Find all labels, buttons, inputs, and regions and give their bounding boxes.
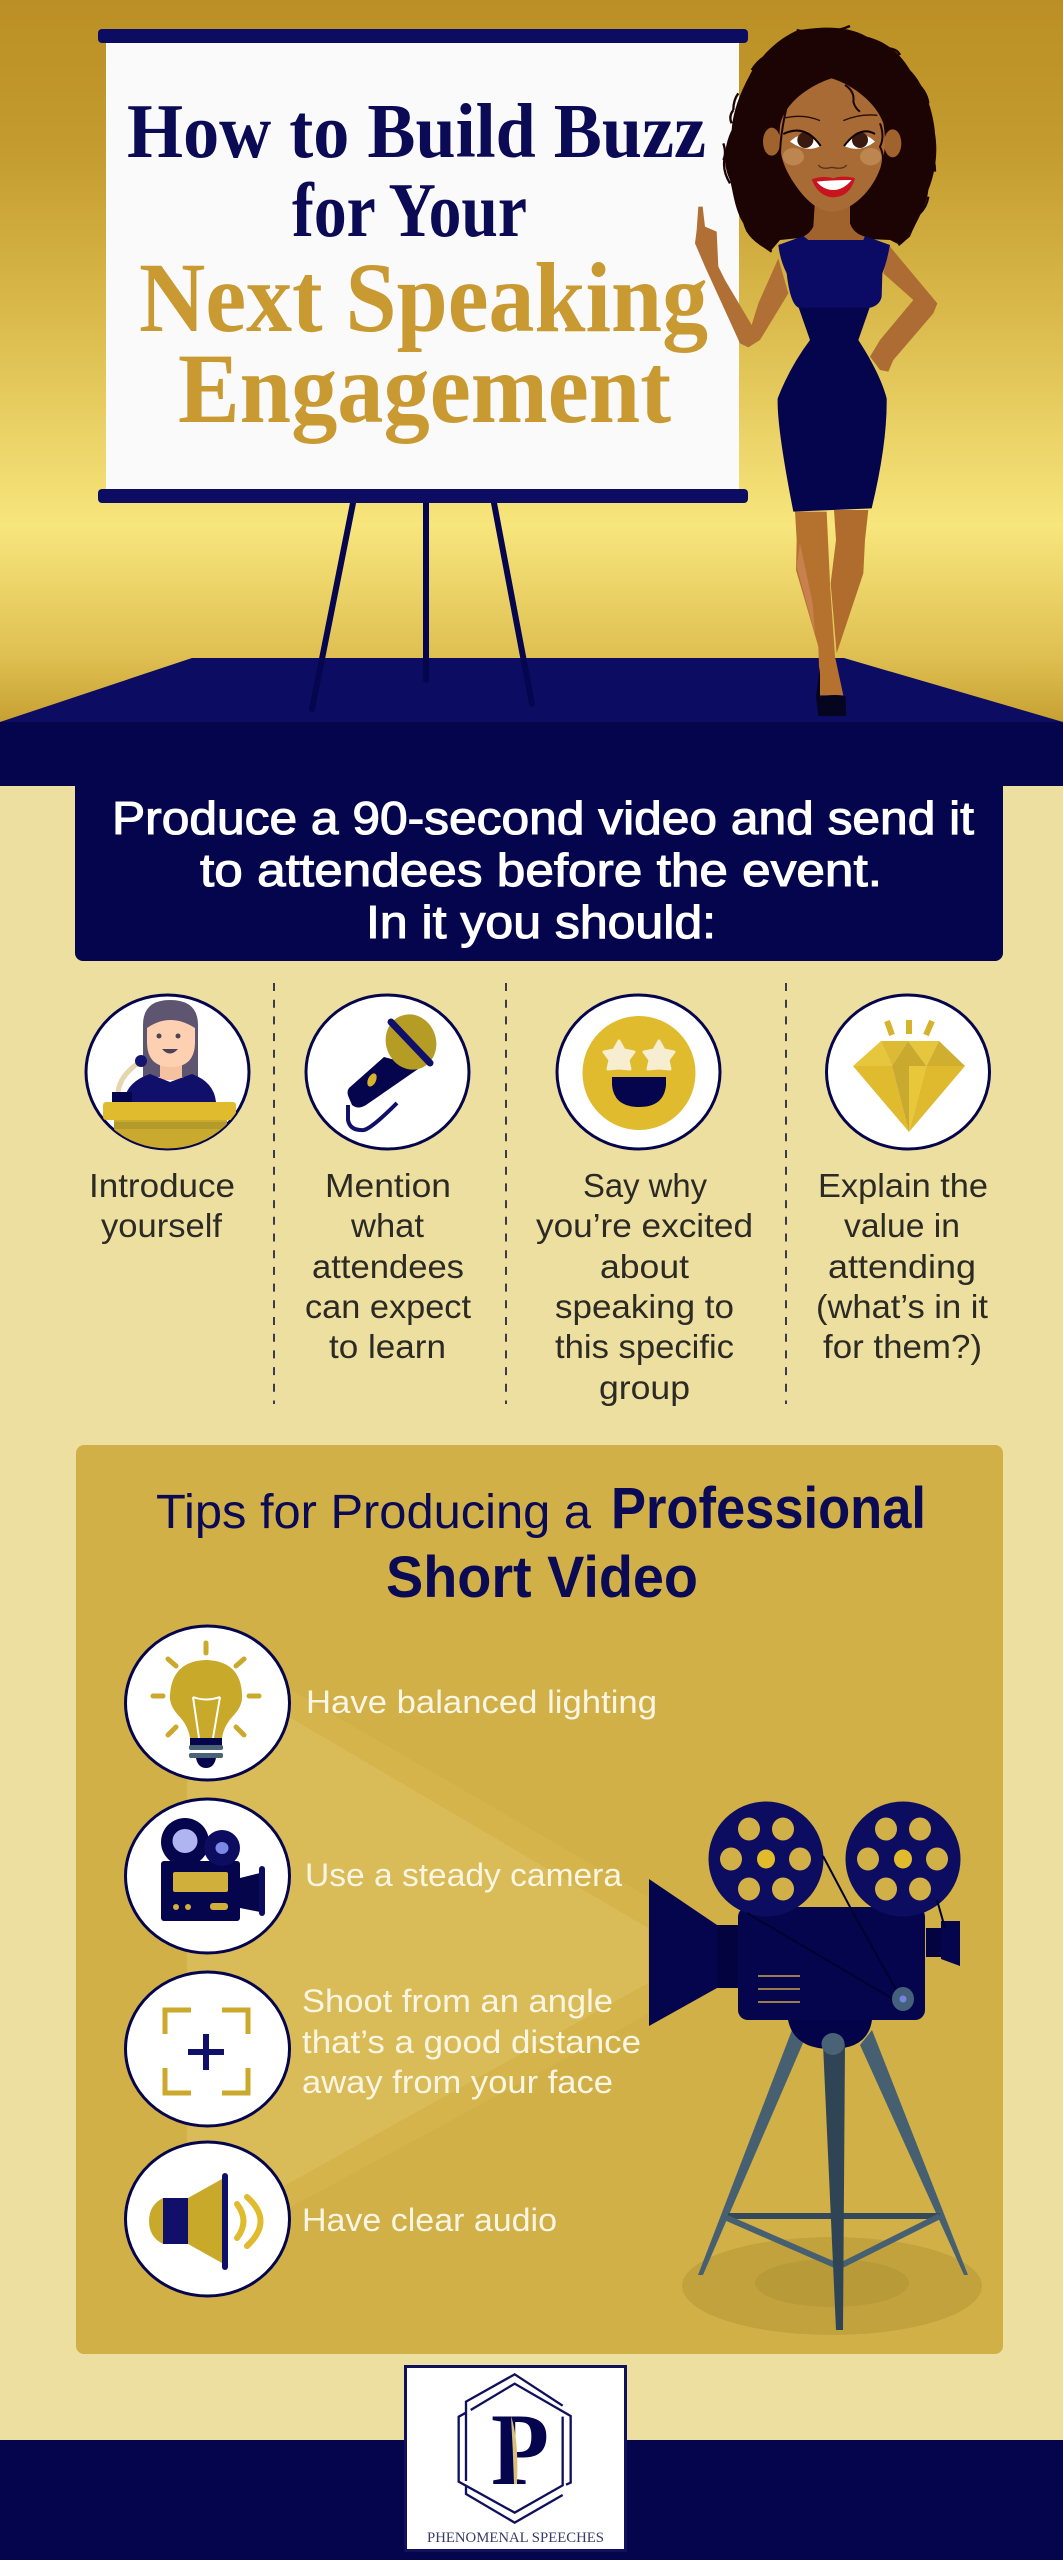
- label: [305, 1167, 471, 1365]
- neck: [803, 197, 865, 241]
- film reels: [708, 1802, 960, 1916]
- left arm: [695, 207, 788, 347]
- label: speaking to: [555, 1288, 734, 1325]
- speaker woman illustration: [695, 26, 937, 716]
- illustration: film camera on tripod: [649, 1802, 982, 2335]
- logo: phenomenal speeches: [406, 2366, 626, 2550]
- label: Explain the: [818, 1167, 988, 1204]
- label: for them?): [823, 1328, 982, 1365]
- banner: produce a video: to attendees before the event.: [200, 844, 882, 896]
- label: value in: [844, 1207, 960, 1244]
- footer band: [0, 2440, 1063, 2560]
- tips heading: Short Video: [386, 1545, 698, 1610]
- icon: speaker at podium: [86, 995, 249, 1154]
- label: this specific: [555, 1328, 734, 1365]
- column 4: explain the value: [816, 995, 990, 1365]
- tip: clear audio: [126, 2142, 557, 2296]
- column 2: mention what attendees can expect: [305, 995, 471, 1365]
- presentation board: [98, 29, 748, 503]
- label: Introduce: [89, 1167, 235, 1204]
- tripod: [698, 2020, 968, 2330]
- tip text: Have balanced lighting: [306, 1684, 657, 1720]
- title: Next Speaking: [139, 242, 708, 353]
- tip text: [302, 1983, 641, 2100]
- projector light beam: [187, 1630, 648, 2263]
- label: attending: [828, 1248, 976, 1285]
- tip text: Shoot from an angle: [302, 1983, 613, 2019]
- hexagon mark: [459, 2374, 571, 2523]
- icon: light bulb: [126, 1626, 290, 1780]
- tip text: Use a steady camera: [305, 1857, 622, 1893]
- easel legs: [312, 503, 532, 709]
- label: what: [350, 1207, 424, 1244]
- tip: steady camera: [126, 1799, 622, 1953]
- tips heading: Professional: [611, 1476, 926, 1541]
- banner: produce a video: [75, 785, 1003, 961]
- column dividers: [274, 983, 786, 1404]
- title: How to Build Buzz: [127, 88, 706, 174]
- title: [127, 88, 708, 444]
- column 3: say why you're excited: [536, 995, 753, 1406]
- label: [89, 1167, 235, 1244]
- gold quill sliver: [511, 2416, 517, 2484]
- label: Say why: [583, 1167, 707, 1204]
- banner: produce a video: In it you should:: [366, 896, 716, 948]
- label: (what’s in it: [816, 1288, 988, 1325]
- tips heading: Tips for Producing a: [156, 1486, 591, 1539]
- title: for Your: [292, 167, 527, 253]
- label: attendees: [312, 1248, 464, 1285]
- face: [763, 78, 901, 212]
- label: yourself: [101, 1207, 223, 1244]
- icon: star-eyed smiling face: [557, 995, 720, 1149]
- label: [536, 1167, 753, 1406]
- header scene: [0, 0, 1063, 786]
- label: about: [600, 1248, 689, 1285]
- column 1: introduce yourself: [86, 995, 249, 1244]
- icon: diamond: [826, 995, 990, 1149]
- icon: megaphone: [126, 2142, 290, 2296]
- stage: [0, 658, 1063, 786]
- tip text: away from your face: [302, 2064, 613, 2100]
- dress: [778, 236, 890, 512]
- tip text: Have clear audio: [302, 2202, 557, 2238]
- panel background: [76, 1445, 1003, 2354]
- tip: balanced lighting: [126, 1626, 657, 1780]
- shoe: [816, 667, 846, 716]
- golden backdrop: [0, 0, 1063, 730]
- right arm: [870, 247, 937, 372]
- hair: [723, 26, 936, 252]
- label: to learn: [329, 1328, 446, 1365]
- icon: camcorder: [126, 1799, 290, 1953]
- panel: tips for producing a video: [76, 1445, 1003, 2354]
- label: Mention: [325, 1167, 451, 1204]
- monogram letter: P: [491, 2393, 549, 2507]
- camera body: [649, 1879, 960, 2026]
- legs: [795, 510, 868, 695]
- tip: shooting angle: [126, 1972, 641, 2126]
- icon: microphone: [306, 995, 469, 1149]
- film strands and roller: [747, 1856, 945, 2011]
- label: can expect: [305, 1288, 471, 1325]
- tips heading: [156, 1476, 926, 1610]
- title: Engagement: [178, 333, 671, 444]
- icon: framing brackets: [126, 1972, 290, 2126]
- label: you’re excited: [536, 1207, 753, 1244]
- brand name: PHENOMENAL SPEECHES: [427, 2530, 604, 2546]
- ground shadow: [682, 2237, 982, 2335]
- tip text: that’s a good distance: [302, 2024, 641, 2060]
- label: [816, 1167, 988, 1365]
- banner: produce a video: Produce a 90-second video and send it: [112, 792, 974, 844]
- label: group: [599, 1369, 690, 1406]
